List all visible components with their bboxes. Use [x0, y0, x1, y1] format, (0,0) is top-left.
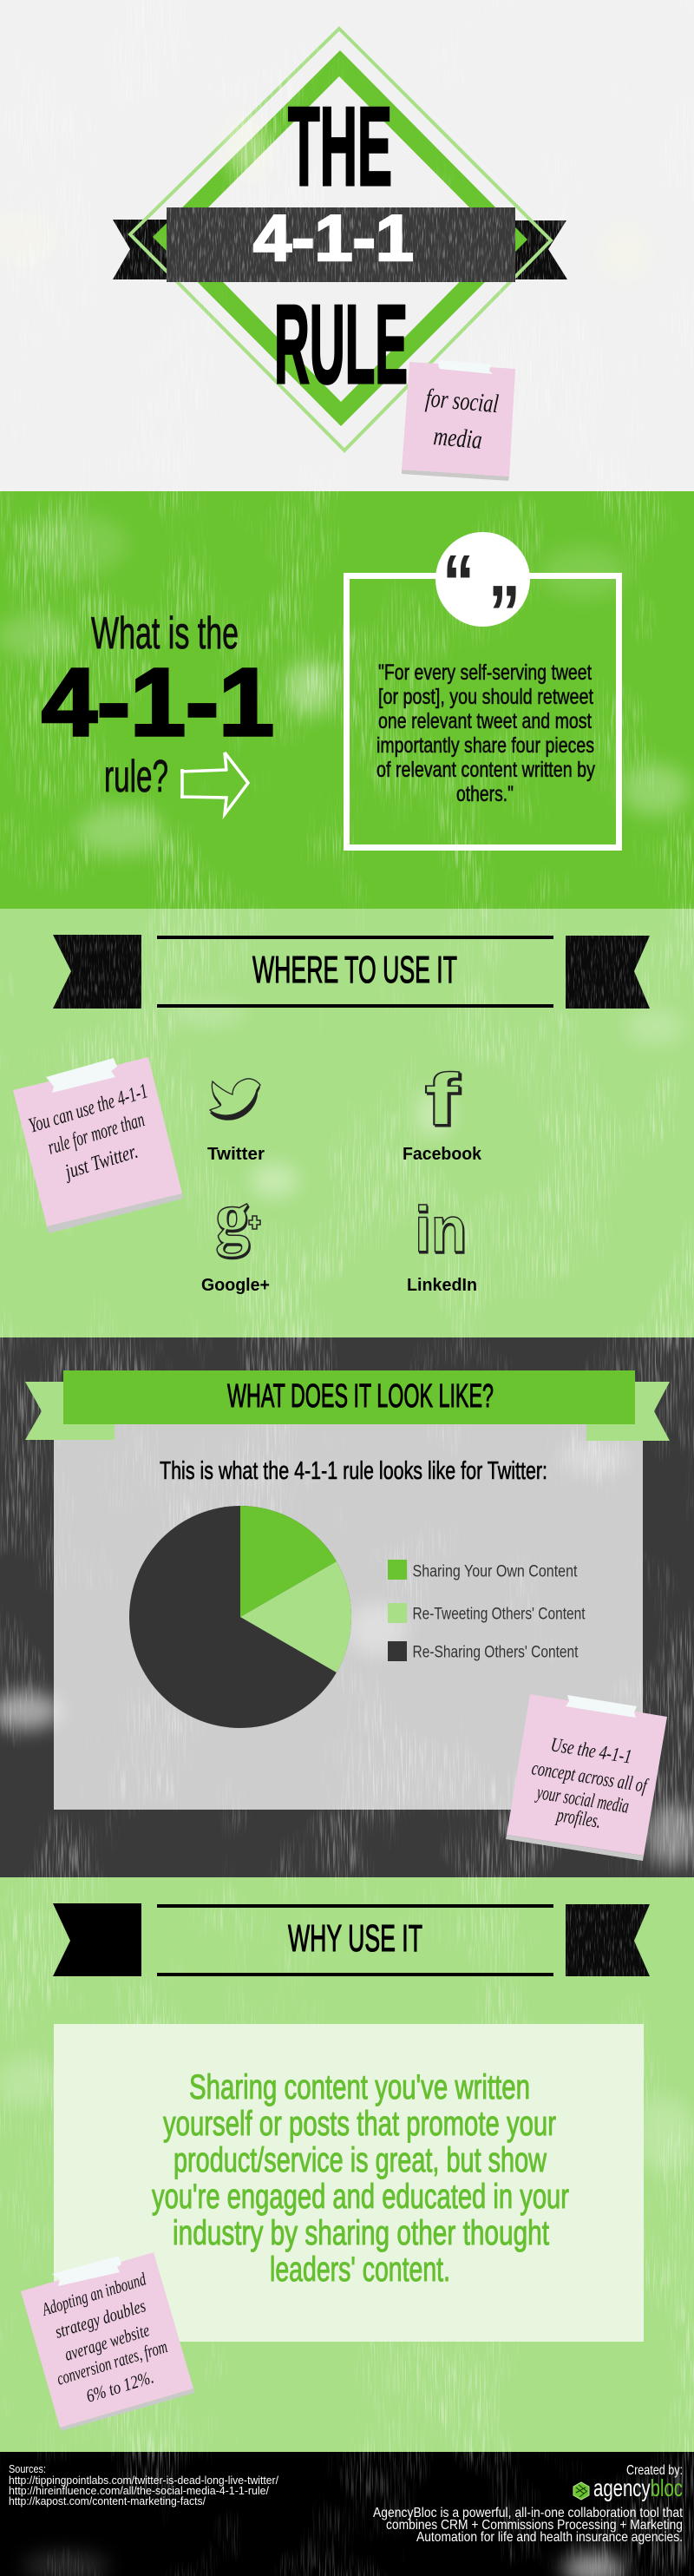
- diamond frame: [130, 29, 551, 450]
- sticky note: inbound strategy: average website: [62, 2319, 152, 2365]
- heading: what is the 4-1-1 rule: rule?: [104, 752, 168, 802]
- footer: sources: Sources:: [9, 2462, 46, 2475]
- heading: what is the 4-1-1 rule: What is the: [91, 608, 239, 659]
- sticky note: inbound strategy: conversion rates, from: [54, 2336, 170, 2389]
- sticky note: inbound strategy: strategy doubles: [52, 2295, 148, 2343]
- footer: created by: [373, 2463, 683, 2545]
- sticky note: across all profiles: Use the 4-1-1: [549, 1733, 633, 1768]
- sticky note: for social media: for social: [424, 384, 500, 418]
- title: 4-1-1: 4-1-1: [253, 201, 414, 274]
- label: Twitter: Twitter: [207, 1145, 265, 1164]
- section banner: what does it look like: WHAT DOES IT LOOK LIKE?: [227, 1378, 494, 1415]
- label: Facebook: Facebook: [403, 1145, 482, 1164]
- title block: RULE: [274, 282, 408, 407]
- footer: company description: [373, 2506, 683, 2545]
- quote text: importantly share four pieces: [376, 733, 594, 758]
- chart legend: Sharing Your Own Content: [413, 1562, 578, 1581]
- sticky note: more than just Twitter: [13, 1057, 183, 1233]
- explanation text: product/service is great, but show: [174, 2141, 547, 2179]
- icon: LinkedIn: in: [415, 1193, 467, 1265]
- ribbon: title banner tails: [113, 220, 567, 279]
- sticky note: inbound strategy: Adopting an inbound: [38, 2268, 148, 2320]
- icon: Facebook: f: [426, 1061, 462, 1142]
- chart panel: grey card: [54, 1424, 643, 1810]
- quote text: others.": [456, 782, 514, 806]
- sticky note: inbound strategy: 6% to 12%.: [83, 2366, 156, 2407]
- footer: sources: http://tippingpointlabs.com/twitter-is-dead-long-live-twitter/: [9, 2474, 278, 2487]
- logo: agencybloc: agencybloc: [593, 2474, 683, 2501]
- icon: Facebook: f: [424, 1059, 460, 1140]
- heading: what is the 4-1-1 rule: 4-1-1: [42, 649, 274, 756]
- title banner: [167, 207, 515, 282]
- quote text: [or post], you should retweet: [378, 685, 593, 709]
- icon: sketched arrow: [180, 752, 248, 814]
- section heading: why use it: WHY USE IT: [288, 1917, 422, 1960]
- sticky note: across all profiles: profiles.: [554, 1804, 603, 1832]
- sticky note: more than just Twitter: You can use the 4-1-1: [26, 1080, 151, 1138]
- sticky note: across all profiles: your social media: [534, 1781, 631, 1817]
- label: Google+: Google+: [201, 1276, 270, 1295]
- chart legend: Re-Sharing Others' Content: [413, 1644, 579, 1661]
- sticky note: across all profiles: concept across all of: [530, 1757, 651, 1797]
- quote circle icon: ”: [488, 570, 520, 657]
- section banner: what does it look like: [25, 1370, 670, 1441]
- section background: footer: [0, 2452, 694, 2576]
- section background: title: [0, 0, 694, 491]
- quote box: [347, 532, 619, 847]
- section background: what is the rule: [0, 491, 694, 909]
- explanation text: [152, 2068, 569, 2289]
- quote text: one relevant tweet and most: [378, 709, 592, 733]
- icon: Google+: g: [216, 1179, 251, 1259]
- section heading: where to use it: WHERE TO USE IT: [252, 949, 457, 991]
- explanation text: Sharing content you've written: [189, 2068, 530, 2106]
- sticky note: inbound strategy: [21, 2252, 194, 2431]
- section background: why use it: [0, 1877, 694, 2452]
- sticky note: across all profiles: [506, 1694, 667, 1861]
- title block: [167, 84, 515, 407]
- label: LinkedIn: LinkedIn: [407, 1276, 477, 1295]
- quote text: "For every self-serving tweet: [378, 660, 592, 685]
- footer: sources: http://kapost.com/content-marketing-facts/: [9, 2494, 206, 2507]
- pie chart: [129, 1506, 351, 1728]
- panel: why use it explanation: [54, 2024, 644, 2342]
- icon: Twitter: [210, 1079, 260, 1120]
- icon: Facebook: [424, 1059, 462, 1142]
- explanation text: industry by sharing other thought: [173, 2214, 549, 2252]
- section background: where to use it: [0, 909, 694, 1337]
- chart subtitle: This is what the 4-1-1 rule looks like for Twitter:: [160, 1457, 547, 1485]
- explanation text: leaders' content.: [270, 2251, 450, 2289]
- sticky note: more than just Twitter: just Twitter.: [61, 1140, 141, 1184]
- icon: LinkedIn: in: [416, 1195, 468, 1267]
- section heading: why use it: [53, 1903, 650, 1976]
- sticky note: more than just Twitter: rule for more than: [45, 1108, 147, 1160]
- explanation text: yourself or posts that promote your: [163, 2105, 556, 2143]
- heading: what is the 4-1-1 rule: [42, 608, 274, 802]
- title block: THE: [288, 84, 392, 209]
- icon: Google+: g: [215, 1177, 250, 1258]
- quote circle icon: “: [442, 540, 475, 627]
- chart legend: Re-Tweeting Others' Content: [413, 1606, 586, 1623]
- section heading: where to use it: [53, 935, 650, 1009]
- section background: what does it look like: [0, 1337, 694, 1877]
- sticky note: for social media: [402, 360, 515, 481]
- quote circle icon: [435, 532, 530, 657]
- chart legend: [388, 1560, 586, 1661]
- sticky note: for social media: media: [432, 422, 483, 455]
- footer: sources: [9, 2462, 278, 2507]
- quote text: [376, 660, 595, 806]
- quote text: of relevant content written by: [376, 758, 595, 782]
- footer: sources: http://hireinfluence.com/all/the-social-media-4-1-1-rule/: [9, 2484, 269, 2497]
